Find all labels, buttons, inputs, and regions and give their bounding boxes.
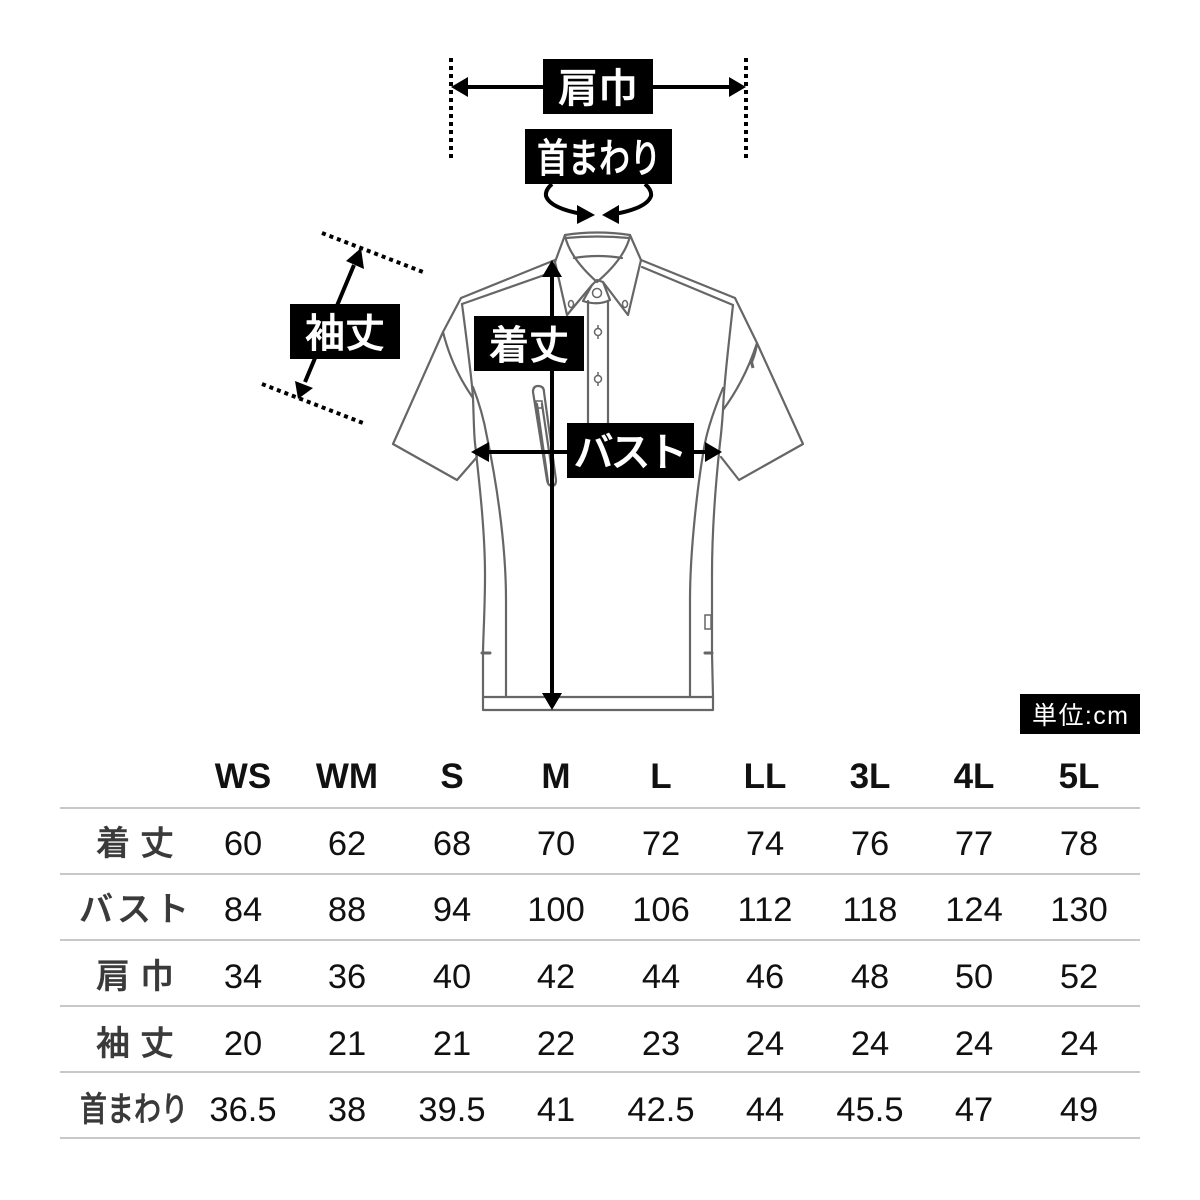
row: bust: バスト (79, 891, 193, 929)
label: neck: 首まわり (537, 137, 661, 181)
row: neck: 36.5 (209, 1091, 277, 1129)
row: sleeve length: 22 (537, 1025, 575, 1063)
row: body length: 76 (851, 825, 889, 863)
right sleeve (721, 298, 803, 480)
buttons (592, 288, 602, 386)
row: neck: 44 (746, 1091, 784, 1129)
header row: 3L (850, 757, 890, 796)
row: neck: 38 (328, 1091, 366, 1129)
header row: M (541, 757, 571, 796)
row: body length: 着丈 (96, 825, 184, 863)
collar (555, 232, 641, 315)
row: shoulder width: 42 (537, 958, 575, 996)
row: body length: 77 (955, 825, 993, 863)
row: shoulder width: 34 (224, 958, 262, 996)
row: sleeve length: 23 (642, 1025, 680, 1063)
hem (483, 697, 713, 710)
header row: L (650, 757, 672, 796)
unit label: 単位:cm (1032, 702, 1128, 730)
row: body length: 60 (224, 825, 262, 863)
row: bust: 100 (527, 891, 585, 929)
header row: S (440, 757, 464, 796)
row: body length (96, 825, 1098, 863)
arrow: neck (546, 184, 651, 224)
row: body length: 70 (537, 825, 575, 863)
label: sleeve length: 袖丈 (305, 312, 385, 356)
vent marks (482, 652, 712, 654)
shoulder yokes (461, 260, 735, 305)
label: body length: 着丈 (489, 324, 569, 368)
unit label (1020, 694, 1140, 734)
row: body length: 72 (642, 825, 680, 863)
label: neck (525, 129, 672, 184)
arrow: bust (471, 442, 722, 462)
row: shoulder width: 52 (1060, 958, 1098, 996)
row: bust: 112 (737, 891, 793, 929)
header row: WM (316, 757, 378, 796)
row: neck: 41 (537, 1091, 575, 1129)
row: neck (80, 1091, 1098, 1129)
row: body length: 78 (1060, 825, 1098, 863)
row: shoulder width: 48 (851, 958, 889, 996)
table rules (60, 807, 1140, 1139)
row: neck: 42.5 (627, 1091, 695, 1129)
row: bust: 94 (433, 891, 471, 929)
row: sleeve length: 24 (851, 1025, 889, 1063)
header row (215, 757, 1099, 796)
row: shoulder width: 40 (433, 958, 471, 996)
row: bust: 84 (224, 891, 262, 929)
header row: WS (215, 757, 271, 796)
pen clip (536, 401, 542, 408)
header row: 5L (1059, 757, 1099, 796)
row: shoulder width: 46 (746, 958, 784, 996)
label: sleeve length (290, 304, 400, 359)
row: shoulder width: 44 (642, 958, 680, 996)
placket (588, 301, 608, 424)
row: sleeve length: 24 (1060, 1025, 1098, 1063)
shirt line drawing (393, 232, 803, 710)
row: shoulder width: 36 (328, 958, 366, 996)
row: shoulder width (96, 958, 1098, 996)
row: sleeve length: 20 (224, 1025, 262, 1063)
left sleeve (393, 298, 477, 480)
row: body length: 62 (328, 825, 366, 863)
row: sleeve length (96, 1025, 1098, 1063)
label: shoulder width: 肩巾 (558, 67, 638, 111)
row: bust: 124 (945, 891, 1003, 929)
pen pocket (533, 386, 556, 486)
row: bust: 118 (842, 891, 898, 929)
sleeve zip (751, 360, 753, 368)
label: bust (567, 423, 694, 478)
row: body length: 74 (746, 825, 784, 863)
side tag (705, 615, 711, 629)
header row: LL (744, 757, 786, 796)
size table (60, 757, 1140, 1139)
row: neck: 49 (1060, 1091, 1098, 1129)
row: bust: 130 (1050, 891, 1108, 929)
row: shoulder width: 肩巾 (96, 958, 184, 996)
row: sleeve length: 24 (746, 1025, 784, 1063)
row: bust: 106 (632, 891, 690, 929)
row: neck: 47 (955, 1091, 993, 1129)
row: sleeve length: 袖丈 (96, 1025, 184, 1063)
row: sleeve length: 24 (955, 1025, 993, 1063)
label: body length (474, 316, 584, 371)
row: neck: 首まわり (80, 1091, 188, 1129)
label: shoulder width (543, 59, 653, 114)
arrow: body length (542, 260, 562, 710)
header row: 4L (954, 757, 994, 796)
label: bust: バスト (574, 431, 684, 475)
row: sleeve length: 21 (433, 1025, 471, 1063)
row: shoulder width: 50 (955, 958, 993, 996)
arrow: shoulder width (451, 58, 746, 158)
row: body length: 68 (433, 825, 471, 863)
left body seams (462, 304, 485, 697)
row: sleeve length: 21 (328, 1025, 366, 1063)
row: neck: 39.5 (418, 1091, 486, 1129)
arrow: sleeve length (262, 233, 423, 423)
right body seams (712, 305, 733, 697)
row: neck: 45.5 (836, 1091, 904, 1129)
row: bust: 88 (328, 891, 366, 929)
row: bust (79, 891, 1108, 929)
